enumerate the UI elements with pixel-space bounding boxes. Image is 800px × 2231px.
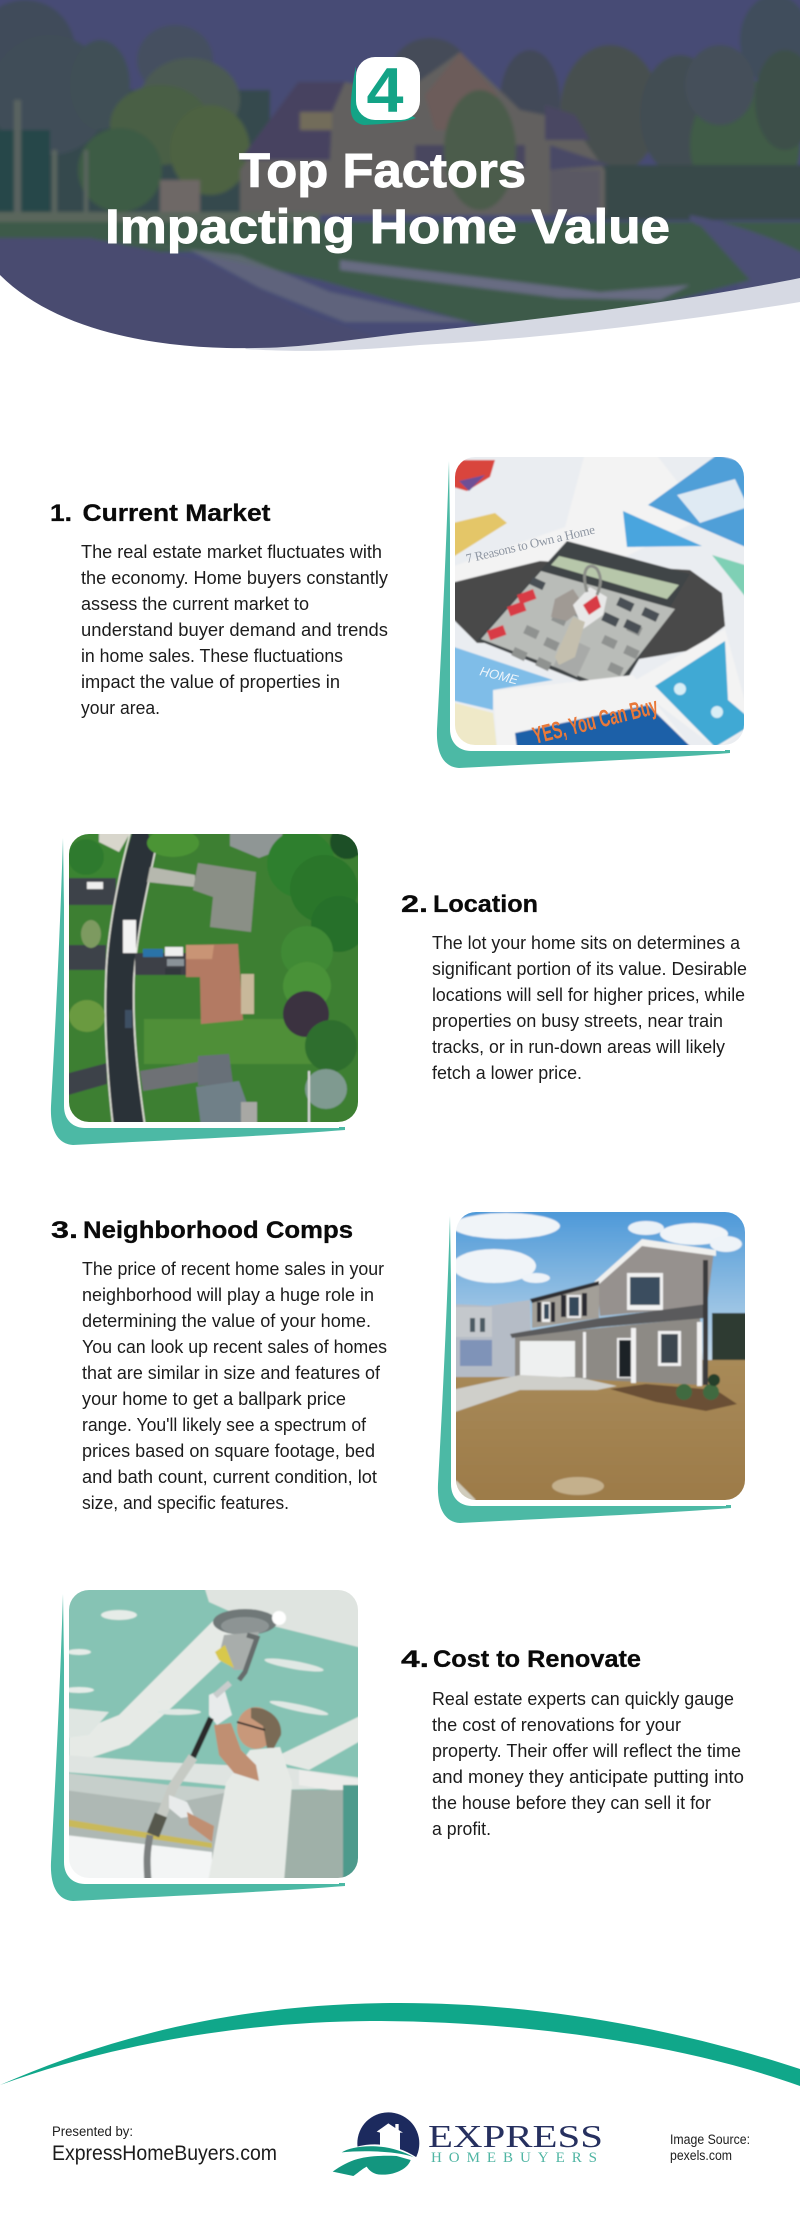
body text: size, and specific features. [82, 1492, 289, 1513]
heading: 2. [401, 891, 428, 918]
body text: range. You'll likely see a spectrum of [82, 1414, 367, 1435]
logo mark [333, 2112, 419, 2177]
body text [432, 932, 747, 1083]
heading: Neighborhood Comps [83, 1217, 353, 1244]
photo card: two-story house [438, 1208, 749, 1523]
logo tagline: HOMEBUYERS [431, 2150, 597, 2166]
body text: the house before they can sell it for [432, 1792, 711, 1813]
curved accent strip [245, 278, 800, 351]
body text: neighborhood will play a huge role in [82, 1284, 374, 1305]
body text: locations will sell for higher prices, while [432, 984, 745, 1005]
photo text: banner: YES, You Can Buy [530, 693, 661, 750]
panel: cost to renovate [51, 1586, 744, 1901]
body text: You can look up recent sales of homes [82, 1336, 387, 1357]
photo card: calculator and keys [437, 453, 748, 768]
heading: Current Market [82, 500, 270, 527]
photo text: paper headline: 7 Reasons to Own a Home [464, 522, 597, 566]
title: Top Factors [239, 145, 526, 198]
header banner [0, 0, 800, 380]
body text: in home sales. These fluctuations [81, 645, 343, 666]
body text: prices based on square footage, bed [82, 1440, 375, 1461]
body text: that are similar in size and features of [82, 1362, 381, 1383]
body text: and money they anticipate putting into [432, 1766, 744, 1787]
body text: determining the value of your home. [82, 1310, 371, 1331]
body text: property. Their offer will reflect the time [432, 1740, 741, 1761]
footer: image source [670, 2132, 750, 2163]
photo card: worker sanding ceiling [51, 1586, 362, 1901]
panel: current market [50, 453, 748, 768]
logo: Express Homebuyers [333, 2112, 603, 2177]
logo wordmark: EXPRESS [428, 2118, 603, 2154]
photo card: aerial neighborhood [51, 825, 367, 1145]
body text [432, 1688, 744, 1839]
header photo: house at dusk [0, 0, 800, 380]
footer: presented by [52, 2124, 277, 2165]
footer arch [0, 2003, 800, 2086]
body text: impact the value of properties in [81, 671, 340, 692]
body text: and bath count, current condition, lot [82, 1466, 377, 1487]
heading: 4. [401, 1646, 429, 1673]
panel: location [51, 825, 747, 1145]
heading: Location [433, 891, 538, 918]
heading: 3. [51, 1217, 78, 1244]
footer: presented by: Presented by: [52, 2124, 133, 2139]
footer: image source: pexels.com [670, 2148, 732, 2163]
body text: your area. [81, 697, 160, 718]
footer: image source: Image Source: [670, 2132, 750, 2147]
body text: properties on busy streets, near train [432, 1010, 723, 1031]
body text [82, 1258, 387, 1513]
panel: neighborhood comps [51, 1208, 749, 1523]
body text: significant portion of its value. Desirable [432, 958, 747, 979]
body text: understand buyer demand and trends [81, 619, 388, 640]
footer: presented by: ExpressHomeBuyers.com [52, 2142, 277, 2165]
body text: your home to get a ballpark price [82, 1388, 346, 1409]
body text: The real estate market fluctuates with [81, 541, 382, 562]
body text: tracks, or in run-down areas will likely [432, 1036, 726, 1057]
body text: the economy. Home buyers constantly [81, 567, 389, 588]
title: Impacting Home Value [105, 201, 670, 254]
heading: Cost to Renovate [433, 1646, 641, 1673]
title [105, 145, 670, 254]
heading: 1. [50, 500, 72, 527]
body text: assess the current market to [81, 593, 309, 614]
number badge: 4 [366, 56, 404, 126]
body text: a profit. [432, 1818, 491, 1839]
photo text: flyer: HOME [478, 663, 520, 687]
body text: The lot your home sits on determines a [432, 932, 741, 953]
body text: fetch a lower price. [432, 1062, 582, 1083]
body text: the cost of renovations for your [432, 1714, 681, 1735]
body text: The price of recent home sales in your [82, 1258, 384, 1279]
body text [81, 541, 389, 718]
number badge [351, 56, 420, 126]
body text: Real estate experts can quickly gauge [432, 1688, 734, 1709]
